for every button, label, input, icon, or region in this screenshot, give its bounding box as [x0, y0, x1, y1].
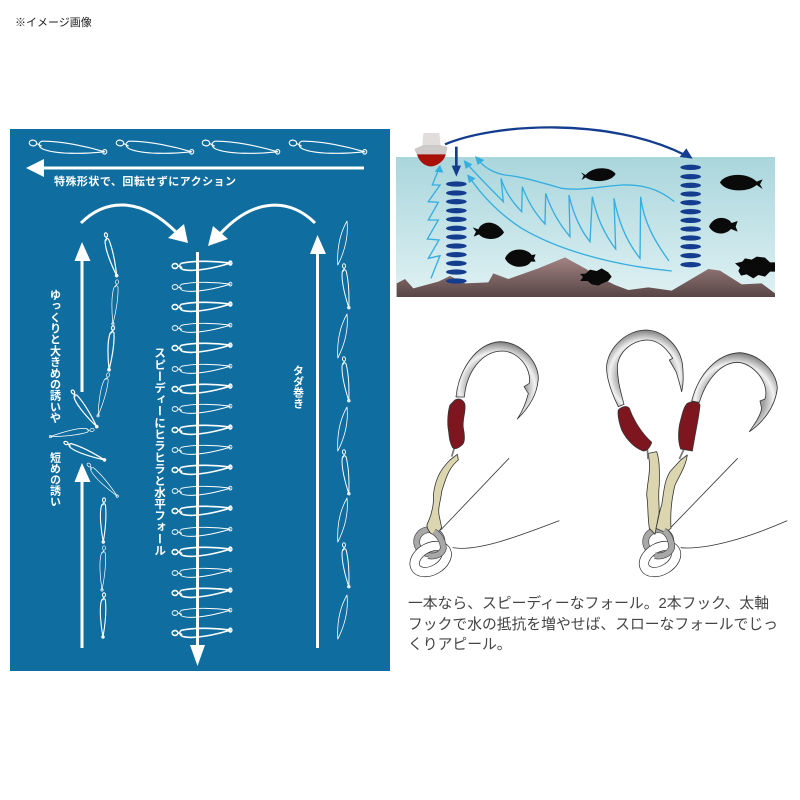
assist cord — [427, 454, 458, 534]
split ring — [417, 530, 442, 554]
spring right — [680, 165, 701, 267]
arrow: curved right — [208, 205, 315, 246]
arrow: center downward — [190, 252, 205, 666]
description text: 一本なら、スピーディーなフォール。2本フック、太軸 — [408, 596, 769, 612]
icon: single assist hook — [410, 341, 560, 578]
cord right — [656, 455, 687, 532]
fish silhouettes — [473, 168, 775, 286]
left jerk lures — [49, 232, 120, 638]
top lures row — [28, 139, 367, 158]
fishing line — [670, 458, 787, 548]
right retrieve lures — [335, 220, 351, 640]
right thread wrap — [679, 402, 700, 451]
hook eye — [452, 446, 455, 457]
arrow: right upward — [310, 235, 326, 648]
solid ring — [639, 541, 681, 577]
label: steady retrieve: タダ巻き — [292, 365, 304, 409]
arrow: top left-pointing — [26, 159, 364, 177]
arrow: left lower upward — [74, 463, 90, 648]
seabed — [397, 257, 775, 297]
description text: くりアピール。 — [408, 637, 512, 653]
icon: boat — [414, 133, 448, 166]
hook eyes — [647, 449, 684, 459]
label: short jerk: 短めの誘い — [48, 451, 61, 507]
arrow: drop — [452, 147, 461, 177]
hook body — [456, 342, 538, 419]
left thread wrap — [618, 407, 652, 451]
ring clip — [428, 532, 443, 556]
right hook body — [692, 353, 777, 432]
water — [396, 157, 775, 297]
split ring — [646, 530, 671, 554]
solid ring — [410, 541, 451, 577]
panel: fishing scene — [396, 126, 775, 297]
fishing line — [441, 458, 559, 548]
left hook body — [607, 330, 683, 407]
panel: lure action diagram — [10, 129, 390, 671]
icon: double assist hook — [606, 330, 788, 578]
spring left — [446, 181, 467, 284]
heading: special shape action: 特殊形状で、回転せずにアクション — [54, 174, 236, 188]
label: speedy flutter fall: スピーディーにヒラヒラと水平フォール — [153, 347, 166, 556]
cord left — [647, 452, 659, 534]
description text — [408, 595, 778, 653]
ring clip — [655, 531, 672, 556]
center fall lures — [172, 260, 232, 638]
arrow: left upper upward — [74, 242, 90, 392]
thread wrap — [448, 399, 465, 449]
description text: フックで水の抵抗を増やせば、スローなフォールでじっ — [408, 617, 778, 633]
arrow: cast arc — [445, 127, 693, 159]
caption: image note: ※イメージ画像 — [15, 17, 92, 29]
label: slow big jerk: ゆっくりと大きめの誘いや — [48, 289, 61, 423]
lure paths — [427, 160, 674, 278]
arrow: curved left — [81, 205, 188, 243]
light arrowheads — [435, 156, 484, 183]
